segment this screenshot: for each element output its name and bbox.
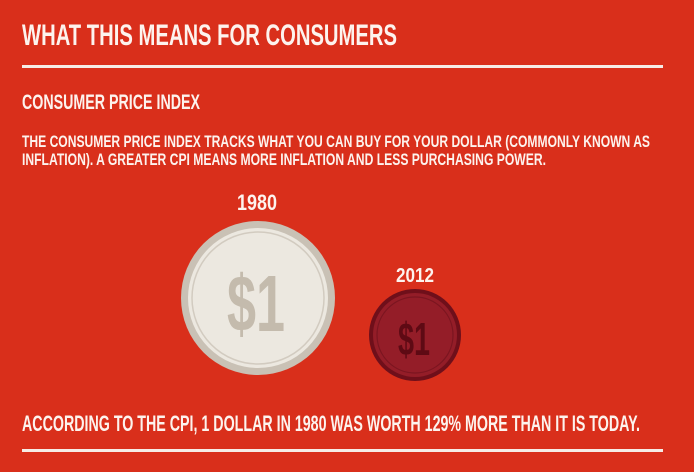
subheading: consumer price index: CONSUMER PRICE INDEX <box>22 91 200 114</box>
icon: 2012 coin <box>369 289 461 381</box>
title: WHAT THIS MEANS FOR CONSUMERS <box>22 19 397 52</box>
icon: 2012 coin: $1 <box>398 313 430 365</box>
icon: 1980 coin: $1 <box>227 259 285 348</box>
label: 2012: 2012 <box>396 265 434 287</box>
label: 1980: 1980 <box>237 190 277 215</box>
icon: 1980 coin <box>181 221 335 375</box>
body text <box>22 132 650 169</box>
